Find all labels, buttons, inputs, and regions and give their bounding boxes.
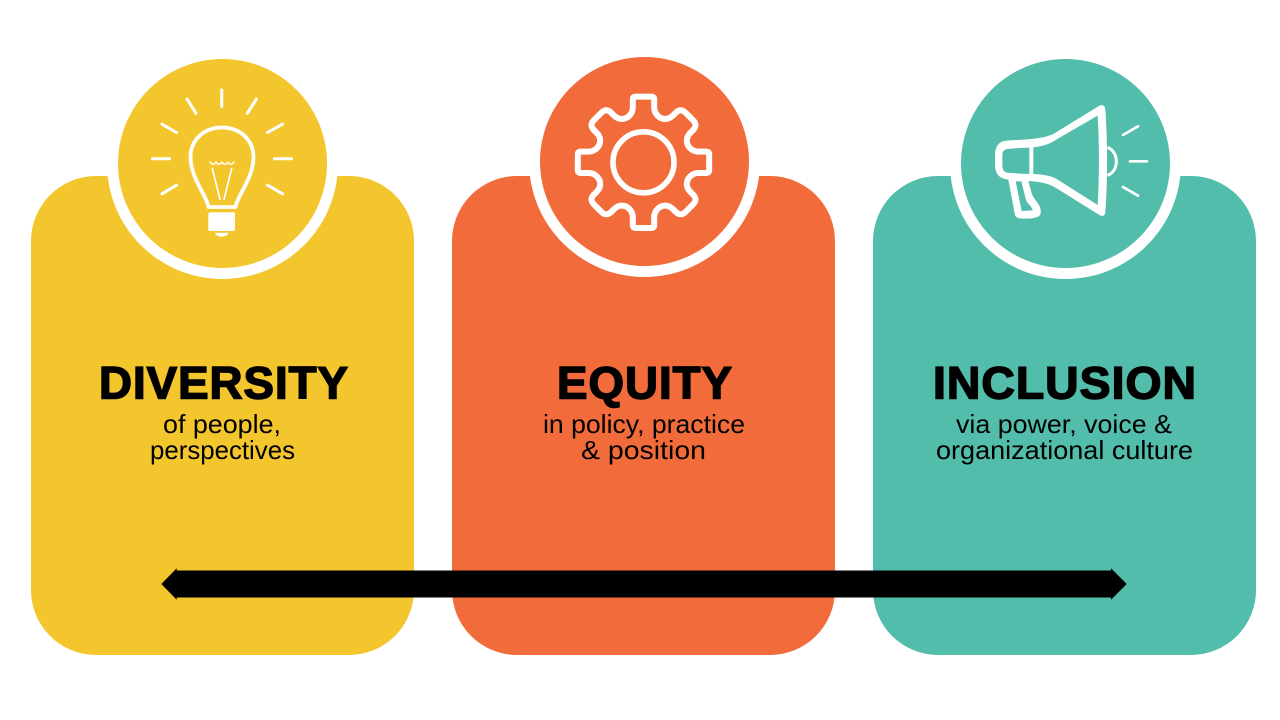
- icon badge: yellow circle: [118, 59, 327, 268]
- text: equity description: & position: [581, 435, 706, 465]
- panel: diversity: [31, 48, 414, 655]
- text: diversity description: [150, 409, 295, 465]
- text: equity description: [543, 409, 745, 465]
- card: diversity background: [31, 176, 414, 655]
- card: equity background: [452, 176, 835, 655]
- text: diversity description: of people,: [163, 409, 281, 439]
- icon: gear: [578, 97, 709, 228]
- text: inclusion description: organizational culture: [936, 435, 1193, 465]
- text: equity description: in policy, practice: [543, 409, 745, 439]
- heading: inclusion: INCLUSION: [933, 357, 1197, 408]
- white ring behind circle: [950, 48, 1181, 279]
- panel: equity: [452, 46, 835, 655]
- panel: inclusion: [873, 48, 1256, 655]
- icon badge: orange circle: [540, 57, 749, 266]
- arrow: double-headed spanning all panels: [161, 568, 1127, 600]
- white ring behind circle: [529, 46, 760, 277]
- text: inclusion description: via power, voice &: [956, 409, 1172, 439]
- heading: diversity: DIVERSITY: [99, 357, 349, 408]
- white ring behind circle: [107, 48, 338, 279]
- card: inclusion background: [873, 176, 1256, 655]
- icon: megaphone: [995, 105, 1147, 219]
- icon: light bulb: [152, 90, 292, 237]
- text: inclusion description: [936, 409, 1193, 465]
- heading: equity: EQUITY: [557, 357, 733, 408]
- text: diversity description: perspectives: [150, 435, 295, 465]
- icon badge: teal circle: [961, 59, 1170, 268]
